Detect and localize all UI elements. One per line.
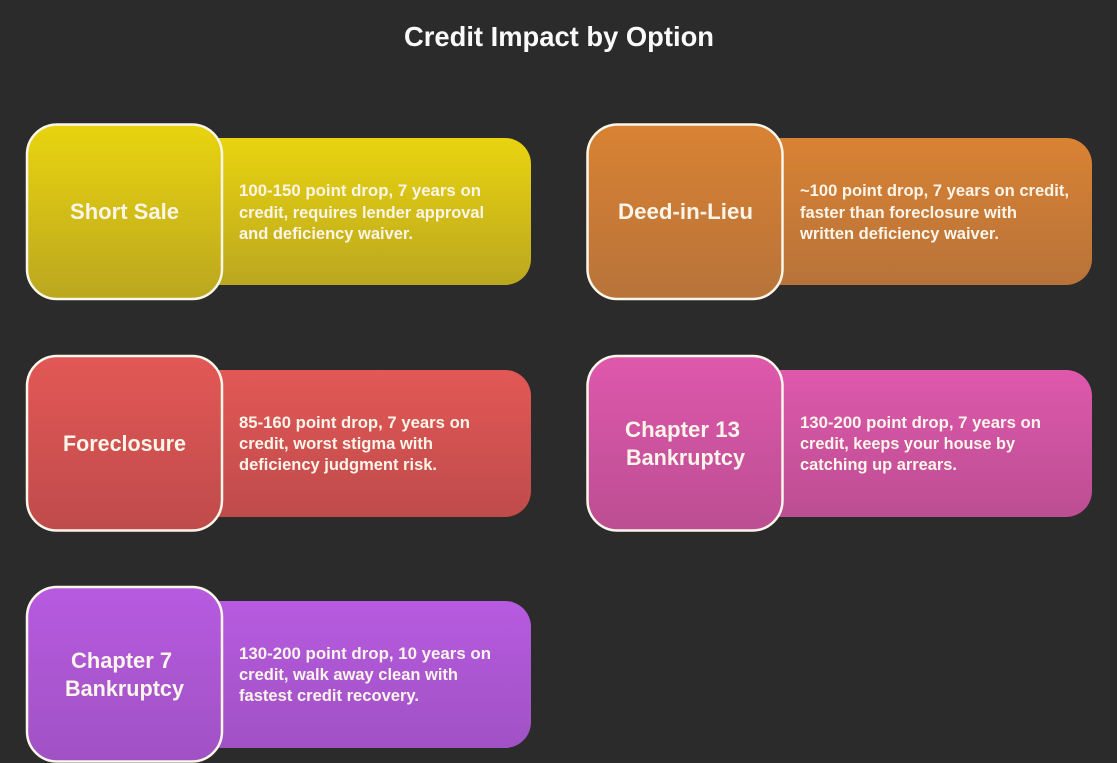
description card: Foreclosure: credit, worst stigma with — [239, 435, 433, 453]
description card: Chapter 13: catching up arrears. — [800, 456, 957, 474]
label box: Chapter 7 — [27, 587, 222, 762]
description card: Short Sale: 100-150 point drop, 7 years on — [239, 182, 481, 200]
panel: Chapter 13 Bankruptcy — [588, 356, 1092, 530]
label box: Chapter 13 — [588, 356, 782, 530]
description card: Deed-in-Lieu: written deficiency waiver. — [799, 225, 999, 243]
description card: Chapter 7: 130-200 point drop, 10 years on — [239, 645, 491, 663]
label box: Foreclosure — [27, 356, 222, 530]
panel: Foreclosure — [27, 356, 531, 530]
panel: Chapter 7 Bankruptcy — [27, 587, 531, 762]
description card: Deed-in-Lieu — [751, 138, 1092, 285]
description card: Deed-in-Lieu: faster than foreclosure with — [800, 204, 1017, 222]
description card: Foreclosure — [190, 370, 531, 517]
description card: Deed-in-Lieu: ~100 point drop, 7 years on credit, — [800, 182, 1069, 200]
description card: Short Sale: and deficiency waiver. — [239, 225, 413, 243]
label box: Deed-in-Lieu — [588, 124, 782, 299]
description card: Chapter 7 — [190, 601, 531, 748]
panel: Short Sale — [27, 124, 531, 299]
description card: Chapter 7: credit, walk away clean with — [239, 666, 458, 684]
description card: Chapter 7: fastest credit recovery. — [239, 687, 419, 705]
label box: Chapter 7: Bankruptcy — [65, 676, 184, 701]
label box: Foreclosure: Foreclosure — [63, 431, 186, 456]
description card: Foreclosure: deficiency judgment risk. — [239, 456, 437, 474]
label box: Chapter 13: Bankruptcy — [626, 445, 745, 470]
label box: Chapter 7: Chapter 7 — [71, 648, 172, 673]
description card: Chapter 13: 130-200 point drop, 7 years on — [800, 414, 1041, 432]
label box: Chapter 13: Chapter 13 — [625, 417, 740, 442]
label box: Short Sale — [27, 124, 222, 299]
description card: Chapter 13: credit, keeps your house by — [800, 435, 1016, 453]
description card: Chapter 13 — [751, 370, 1092, 517]
description card: Short Sale: credit, requires lender approval — [239, 204, 484, 222]
label box: Deed-in-Lieu: Deed-in-Lieu — [618, 199, 753, 224]
panel: Deed-in-Lieu — [588, 124, 1092, 299]
description card: Short Sale — [190, 138, 531, 285]
label box: Short Sale: Short Sale — [70, 199, 179, 224]
description card: Foreclosure: 85-160 point drop, 7 years on — [239, 414, 470, 432]
title: Credit Impact by Option — [404, 21, 714, 52]
